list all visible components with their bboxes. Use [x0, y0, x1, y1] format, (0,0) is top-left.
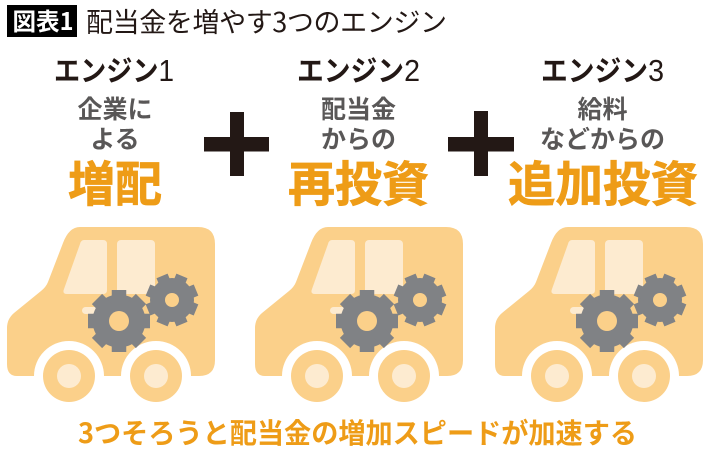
- column: engine 3 heading: などからの: [540, 120, 665, 156]
- plus sign 1: [204, 112, 269, 176]
- column: engine 1 heading: よる: [90, 120, 140, 156]
- column: engine 2 heading: からの: [321, 120, 396, 156]
- title text: 配当金を増やす3つのエンジン: [86, 1, 447, 40]
- title: [7, 1, 447, 40]
- column: engine 2 heading: エンジン2: [297, 48, 420, 90]
- figure label badge: 図表1: [12, 2, 74, 37]
- column: engine 3 heading: [508, 48, 698, 215]
- icon: truck with gears 2: [248, 227, 470, 411]
- icon: truck with gears 3: [488, 227, 710, 411]
- column: engine 2 heading: 再投資: [288, 145, 429, 215]
- icon: truck with gears 1: [0, 227, 222, 411]
- icon: small gear: [626, 266, 694, 334]
- plus sign 2: [448, 111, 514, 176]
- column: engine 1 heading: 増配: [68, 145, 162, 215]
- icon: large gear: [88, 290, 150, 352]
- column: engine 1 heading: エンジン1: [54, 48, 174, 90]
- icon: large gear: [336, 290, 398, 352]
- column: engine 3 heading: エンジン3: [541, 48, 664, 90]
- icon: large gear: [576, 290, 638, 352]
- column: engine 2 heading: [288, 48, 429, 215]
- column: engine 3 heading: 給料: [577, 90, 628, 126]
- column: engine 1 heading: 企業に: [77, 90, 153, 126]
- column: engine 2 heading: 配当金: [321, 90, 396, 126]
- icon: small gear: [138, 266, 206, 334]
- column: engine 1 heading: [54, 48, 174, 215]
- column: engine 3 heading: 追加投資: [508, 145, 698, 215]
- icon: small gear: [386, 266, 454, 334]
